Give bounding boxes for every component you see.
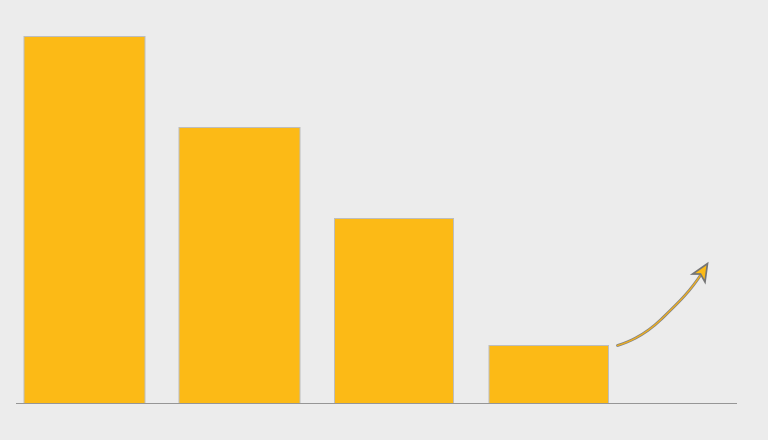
bar 1 (24, 36, 145, 404)
baseline axis (16, 403, 737, 404)
bar 3 (334, 218, 454, 404)
bar 4 (489, 346, 608, 404)
arrow: upward trend (618, 264, 708, 346)
bar 2 (179, 128, 300, 404)
